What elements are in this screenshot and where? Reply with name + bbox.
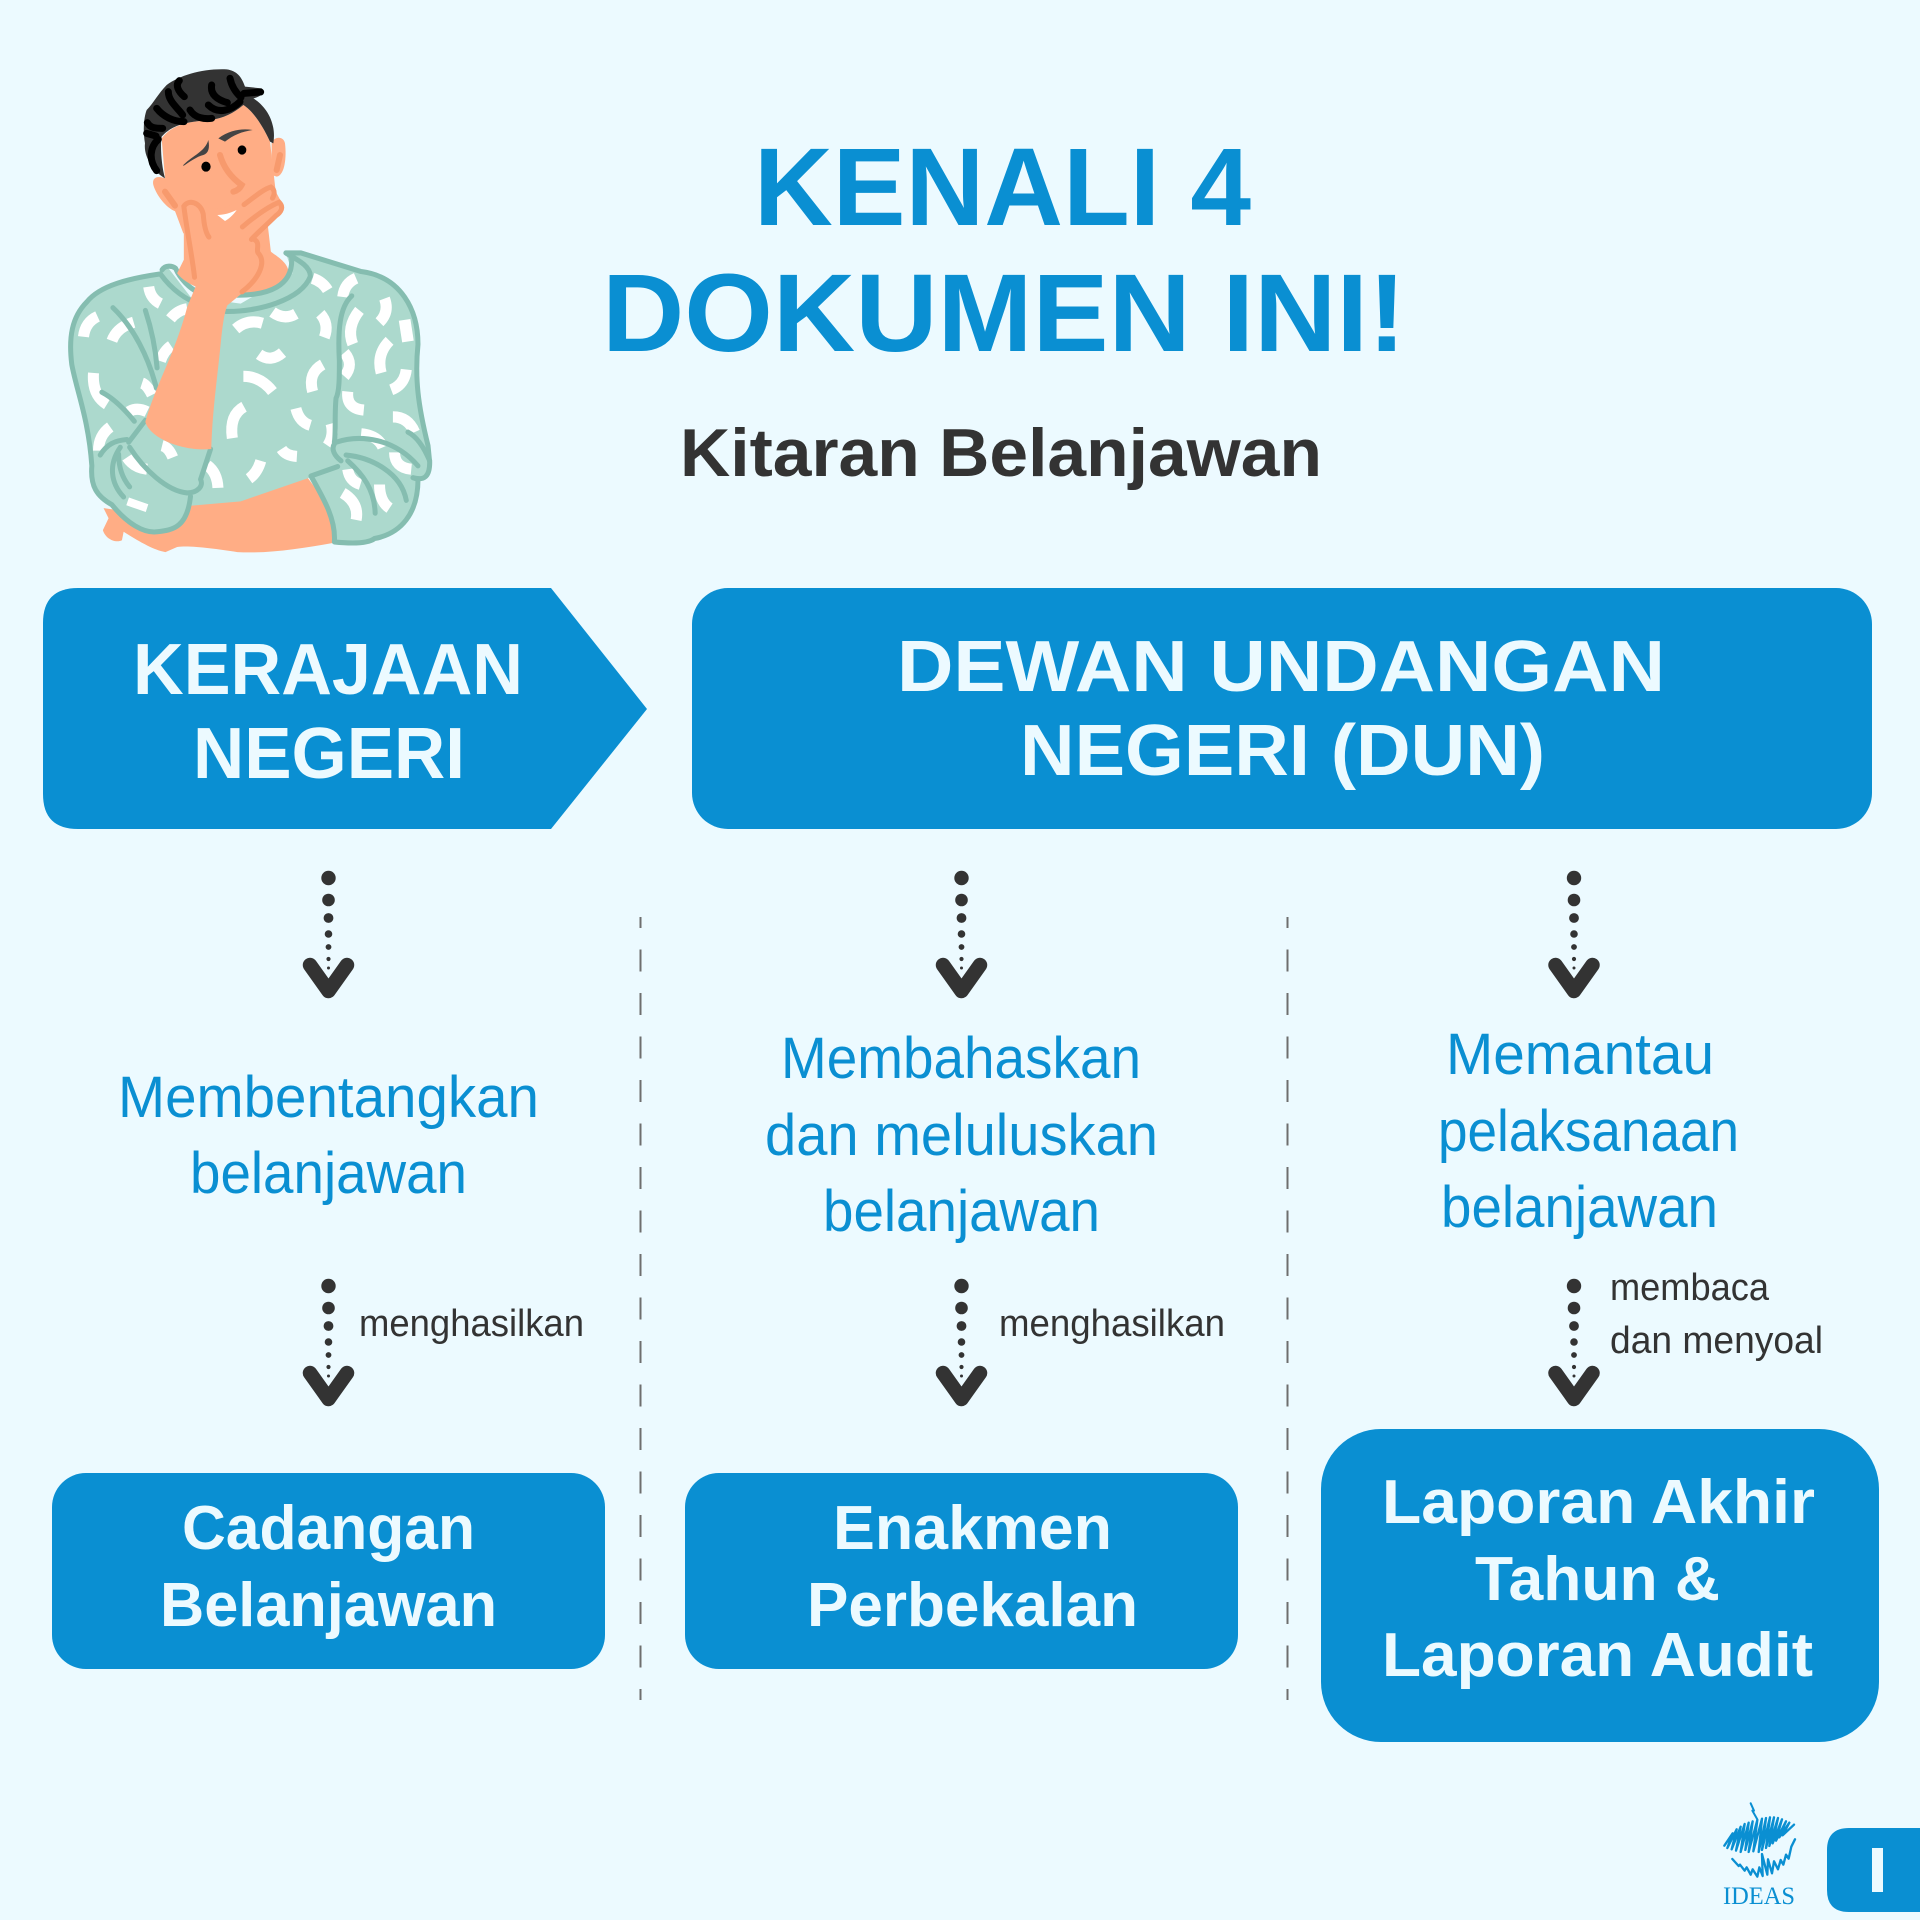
footer tab: [1827, 1828, 1920, 1912]
text: Membahaskan dan meluluskan belanjawan: dan meluluskan: [765, 1103, 1158, 1168]
arrow: menghasilkan 2: [943, 1279, 980, 1399]
panel: Kerajaan Negeri: KERAJAAN: [133, 630, 523, 710]
panel: Dewan Undangan Negeri: [692, 588, 1872, 829]
arrow: Kerajaan to Membentangkan: [310, 871, 347, 991]
text: Membentangkan belanjawan: [118, 1065, 539, 1206]
box: Cadangan Belanjawan: Cadangan: [182, 1494, 475, 1563]
text: Memantau pelaksanaan belanjawan: Memantau: [1446, 1022, 1714, 1087]
text: Memantau pelaksanaan belanjawan: pelaksanaan: [1438, 1099, 1739, 1164]
text: Membentangkan belanjawan: Membentangkan: [118, 1065, 539, 1130]
body and sweater: [71, 223, 430, 552]
box: Cadangan Belanjawan: [52, 1473, 605, 1669]
face: [162, 105, 283, 233]
subtitle: Kitaran Belanjawan: [680, 415, 1322, 491]
box: Enakmen Perbekalan: Perbekalan: [807, 1571, 1138, 1640]
title: DOKUMEN INI!: [602, 252, 1406, 375]
hair curls: [147, 78, 261, 171]
label: menghasilkan 2: menghasilkan: [999, 1303, 1225, 1345]
collar front: [237, 256, 292, 295]
box: Enakmen Perbekalan: [685, 1473, 1238, 1669]
box: Laporan Akhir Tahun & Laporan Audit: Laporan Akhir: [1382, 1468, 1815, 1537]
left ear: [153, 177, 180, 212]
title: [602, 126, 1406, 375]
raised arm and hand: [145, 187, 284, 449]
right ear: [272, 138, 286, 177]
facial details: [165, 129, 280, 221]
forearm and hand resting: [103, 478, 333, 552]
box: Enakmen Perbekalan: Enakmen: [833, 1494, 1112, 1563]
sweater pattern: [83, 278, 415, 520]
text: Membahaskan dan meluluskan belanjawan: Membahaskan: [781, 1026, 1141, 1091]
eyebrows: [183, 129, 253, 166]
arrow: menghasilkan 1: [310, 1279, 347, 1399]
nose and ear creases: [165, 155, 280, 206]
text: Memantau pelaksanaan belanjawan: [1438, 1022, 1739, 1240]
panel: Kerajaan Negeri: [43, 588, 647, 829]
smile: [217, 210, 237, 221]
text: Membahaskan dan meluluskan belanjawan: belanjawan: [823, 1179, 1100, 1244]
box: Laporan Akhir Tahun & Laporan Audit: Tahun &: [1475, 1545, 1720, 1614]
panel: Dewan Undangan Negeri: DEWAN UNDANGAN: [897, 627, 1665, 707]
illustration: thinking man: [71, 69, 430, 552]
box: Laporan Akhir Tahun & Laporan Audit: Laporan Audit: [1382, 1621, 1813, 1690]
box: Cadangan Belanjawan: Belanjawan: [160, 1571, 497, 1640]
arrow: DUN to Membahaskan: [943, 871, 980, 991]
logo: IDEAS: [1723, 1803, 1795, 1910]
sweater outline: [71, 253, 430, 543]
sweater: [71, 253, 430, 543]
text: Membentangkan belanjawan: belanjawan: [190, 1141, 467, 1206]
panel: Dewan Undangan Negeri: NEGERI (DUN): [1020, 711, 1545, 791]
hair: [144, 69, 274, 178]
logo: IDEAS: IDEAS: [1723, 1883, 1795, 1910]
label: membaca dan menyoal: membaca: [1610, 1267, 1770, 1309]
label: menghasilkan 1: menghasilkan: [359, 1303, 584, 1345]
label: membaca dan menyoal: dan menyoal: [1610, 1320, 1823, 1362]
label: membaca dan menyoal: [1610, 1267, 1823, 1362]
panel: Kerajaan Negeri: NEGERI: [193, 714, 465, 794]
neck: [177, 223, 288, 294]
eyes: [201, 145, 246, 172]
text: Memantau pelaksanaan belanjawan: belanjawan: [1441, 1175, 1718, 1240]
title: KENALI 4: [754, 126, 1251, 249]
arrow: DUN to Memantau: [1556, 871, 1592, 991]
head: [144, 69, 286, 233]
arrow: membaca dan menyoal: [1556, 1279, 1592, 1399]
box: Laporan Akhir Tahun & Laporan Audit: [1321, 1429, 1879, 1742]
text: Membahaskan dan meluluskan belanjawan: [765, 1026, 1158, 1244]
